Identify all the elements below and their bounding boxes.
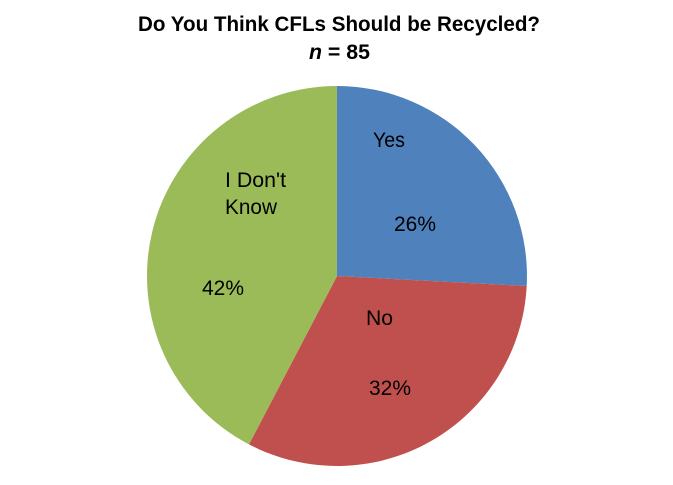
label: 26%: 26% xyxy=(394,213,436,236)
label: I Don't Know: Know xyxy=(225,196,278,219)
label: I Don't Know: I Don't xyxy=(225,169,286,192)
title xyxy=(138,13,540,64)
title: Do You Think CFLs Should be Recycled? xyxy=(138,13,540,36)
label: 42%: 42% xyxy=(202,277,244,300)
pie chart xyxy=(147,86,527,466)
label: No: No xyxy=(366,307,393,330)
slice: I Don't Know 42% xyxy=(147,86,337,444)
label: Yes: Yes xyxy=(373,129,405,152)
slice: Yes 26% xyxy=(337,86,527,286)
label: I Don't Know xyxy=(225,169,286,219)
title: n = 85 xyxy=(309,41,370,64)
label: 32%: 32% xyxy=(369,377,411,400)
slice: No 32% xyxy=(249,276,527,466)
